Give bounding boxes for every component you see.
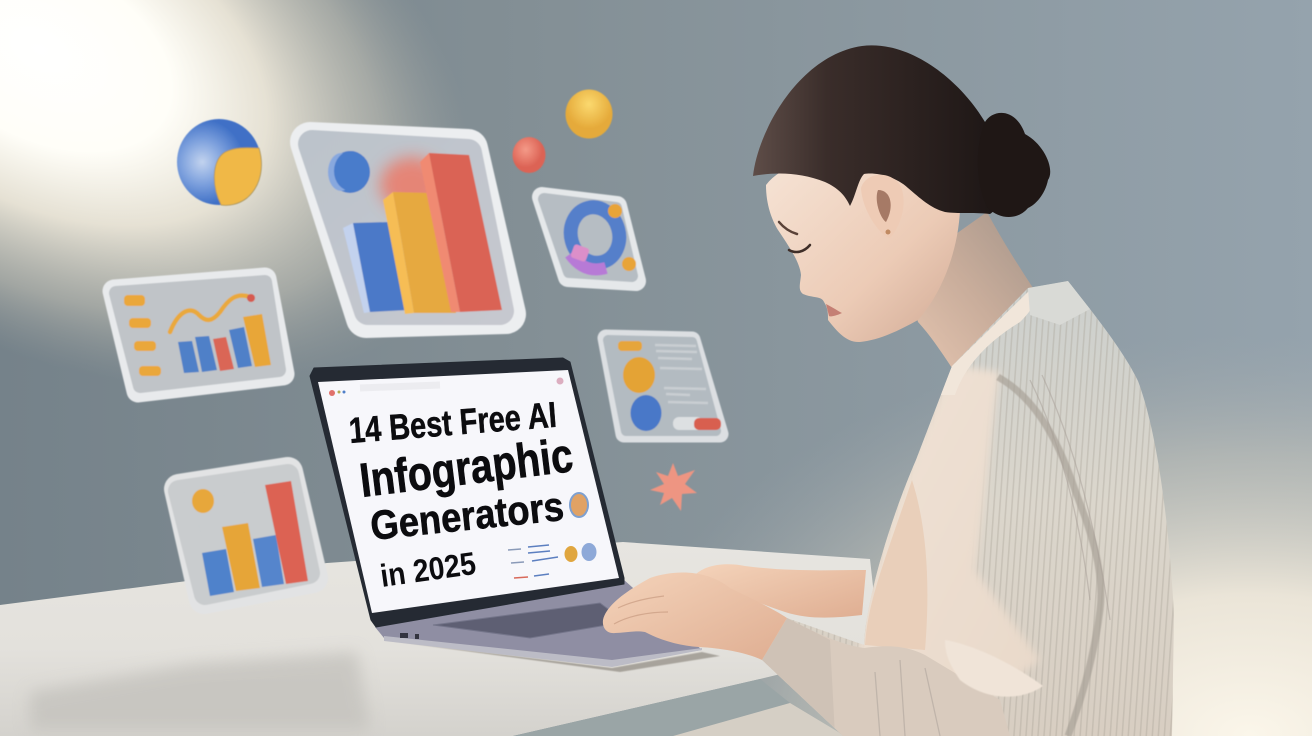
desk side band	[513, 679, 790, 736]
screen title: Infographic	[357, 429, 576, 508]
panel: line and bar chart	[114, 279, 283, 391]
browser bar	[329, 378, 564, 396]
collar back	[1028, 281, 1090, 325]
panel: donut chart	[542, 197, 636, 281]
sweater	[750, 270, 1180, 736]
sleeve shadow	[762, 618, 834, 728]
icon: coral star	[650, 463, 697, 511]
panel: main bar chart	[310, 142, 506, 318]
laptop shadow	[384, 640, 720, 672]
far hand and arm	[695, 564, 866, 618]
bar: yellow	[383, 192, 456, 314]
arm seam	[998, 377, 1101, 736]
sphere: blue and yellow	[177, 119, 261, 205]
collar band	[940, 290, 1034, 395]
panel: list card	[606, 338, 721, 434]
panel: small bar chart	[179, 472, 313, 599]
desk	[0, 542, 880, 736]
lips	[826, 304, 842, 316]
eyebrow	[779, 222, 797, 234]
orange dot	[192, 489, 214, 513]
hair bun	[978, 113, 1050, 217]
laptop	[310, 358, 702, 667]
sweater front chest	[857, 364, 1038, 696]
screen list lines	[508, 545, 558, 578]
person	[603, 45, 1180, 736]
blue circle	[630, 395, 662, 431]
screen title: Generators	[368, 483, 566, 549]
small bars	[178, 314, 271, 373]
near hand	[603, 573, 787, 660]
screen title	[347, 394, 576, 594]
screen	[318, 370, 619, 613]
bar: blue	[343, 222, 408, 313]
ear inner	[877, 190, 891, 222]
laptop base	[375, 579, 702, 667]
sweater ribbing	[875, 375, 1110, 736]
toggle button	[673, 417, 721, 430]
legend dashes	[124, 295, 161, 376]
dots	[608, 204, 636, 271]
ear	[861, 175, 904, 238]
screen title: 14 Best Free AI	[347, 394, 558, 451]
earring	[886, 230, 890, 234]
orange circle	[623, 357, 655, 393]
screen pie icon	[570, 493, 588, 517]
eye	[789, 245, 810, 252]
desk lower shelf	[673, 703, 845, 736]
neck	[905, 212, 1033, 368]
donut	[565, 202, 625, 269]
keyboard	[433, 603, 625, 638]
finger lines	[614, 596, 668, 624]
text lines	[655, 345, 708, 403]
near sleeve	[811, 630, 1009, 736]
icon: blue ball	[328, 151, 370, 193]
screen title: in 2025	[378, 545, 478, 594]
trend end dot	[247, 294, 255, 302]
ports	[400, 633, 419, 639]
bar: red	[420, 153, 502, 312]
face	[766, 156, 960, 342]
laptop lid	[310, 358, 624, 627]
screen dots	[564, 543, 596, 562]
sphere: red	[512, 137, 546, 173]
orange tab	[618, 341, 642, 351]
hair	[753, 45, 999, 214]
sphere: yellow	[566, 90, 612, 138]
inner chest fold	[865, 480, 927, 650]
sleeve fold highlight	[945, 640, 1043, 697]
line trend	[170, 295, 250, 332]
bars	[202, 481, 308, 596]
